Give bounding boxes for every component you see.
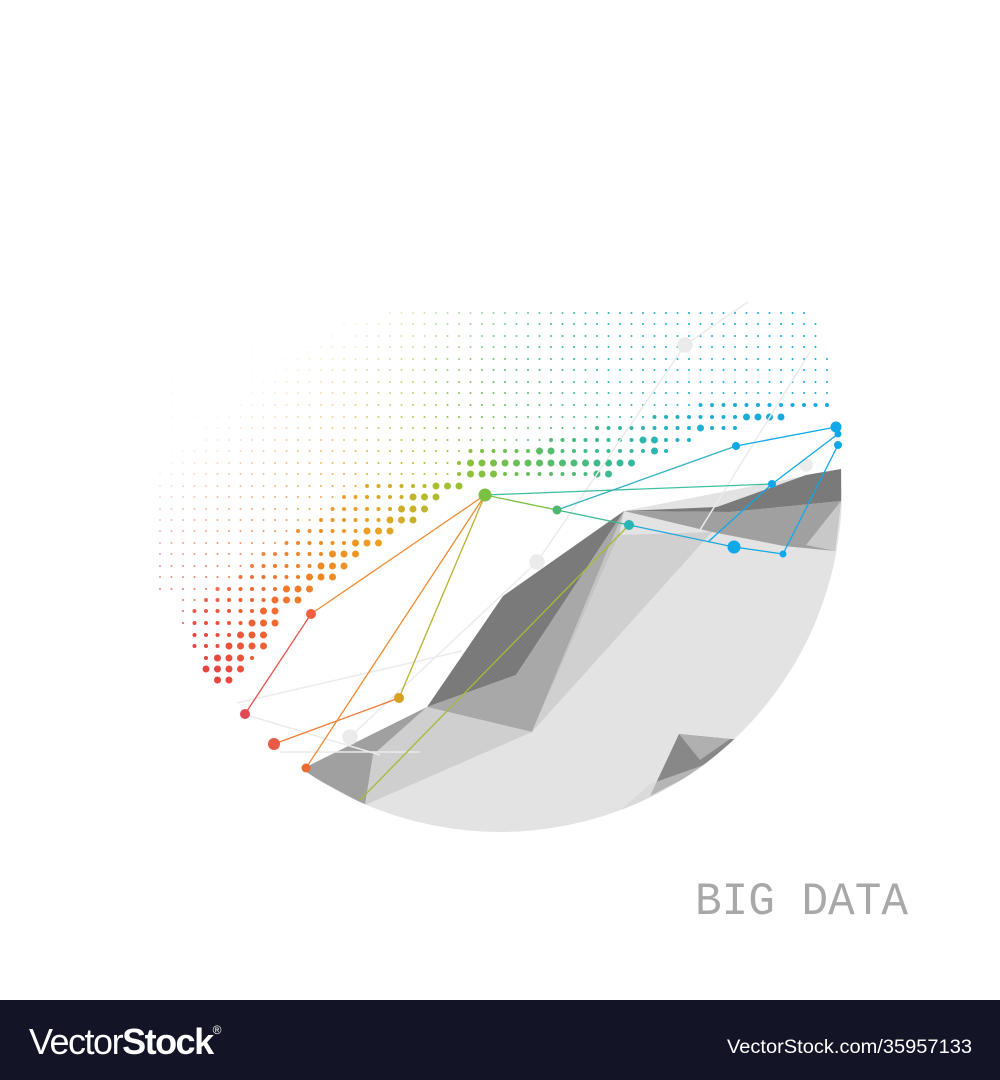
faint gray network lines [237,302,812,755]
title: BIG DATA: BIG DATA [695,876,908,928]
footer logo: VectorStock [29,1021,213,1062]
footer logo: ® [213,1023,222,1037]
dotted color band [160,313,828,680]
colored network lines and nodes [245,427,838,800]
footer url: VectorStock.com/35957133 [727,1036,972,1058]
gray low-poly mountain [306,469,842,832]
footer bar [0,1000,1000,1080]
